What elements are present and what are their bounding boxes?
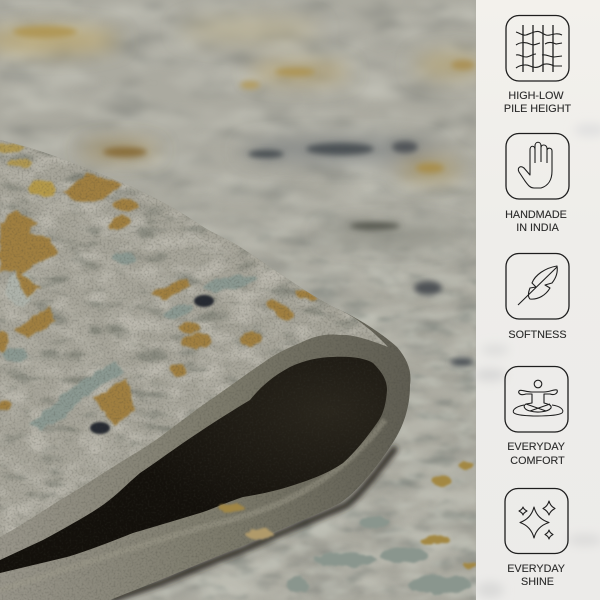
dark rug underside [0, 357, 387, 573]
gold thread on lower band [219, 504, 274, 539]
label: everyday comfort: COMFORT [510, 455, 565, 467]
shadow under the roll [110, 447, 396, 600]
label: everyday shine: SHINE [521, 576, 554, 588]
feature: handmade in india [505, 134, 570, 234]
white icon panel [474, 0, 600, 600]
feature: everyday shine [505, 488, 568, 588]
rolled rug top surface [0, 140, 388, 537]
rolled rug silhouette and binding [0, 140, 410, 600]
feature: high-low pile height [504, 16, 571, 115]
icon: pile weave [506, 16, 569, 81]
label: high-low pile height: HIGH-LOW [508, 90, 564, 102]
icon: hand [506, 134, 569, 199]
label: handmade in india: IN INDIA [516, 222, 560, 234]
icon: feather [506, 254, 569, 319]
lower rug surface with blue-grey pile [287, 461, 477, 594]
light stripe on lower binding [83, 418, 387, 564]
icon: sparkles [505, 488, 568, 554]
feature: softness [506, 254, 569, 341]
feature: everyday comfort [505, 366, 568, 467]
label: softness: SOFTNESS [508, 329, 567, 341]
rug pattern patches [1, 253, 257, 430]
pile fibre grain on roll [0, 130, 420, 600]
label: high-low pile height: PILE HEIGHT [504, 103, 571, 115]
label: handmade in india: HANDMADE [505, 209, 567, 221]
icon: meditating figure [505, 366, 568, 432]
label: everyday shine: EVERYDAY [507, 563, 565, 575]
label: everyday comfort: EVERYDAY [507, 441, 565, 453]
